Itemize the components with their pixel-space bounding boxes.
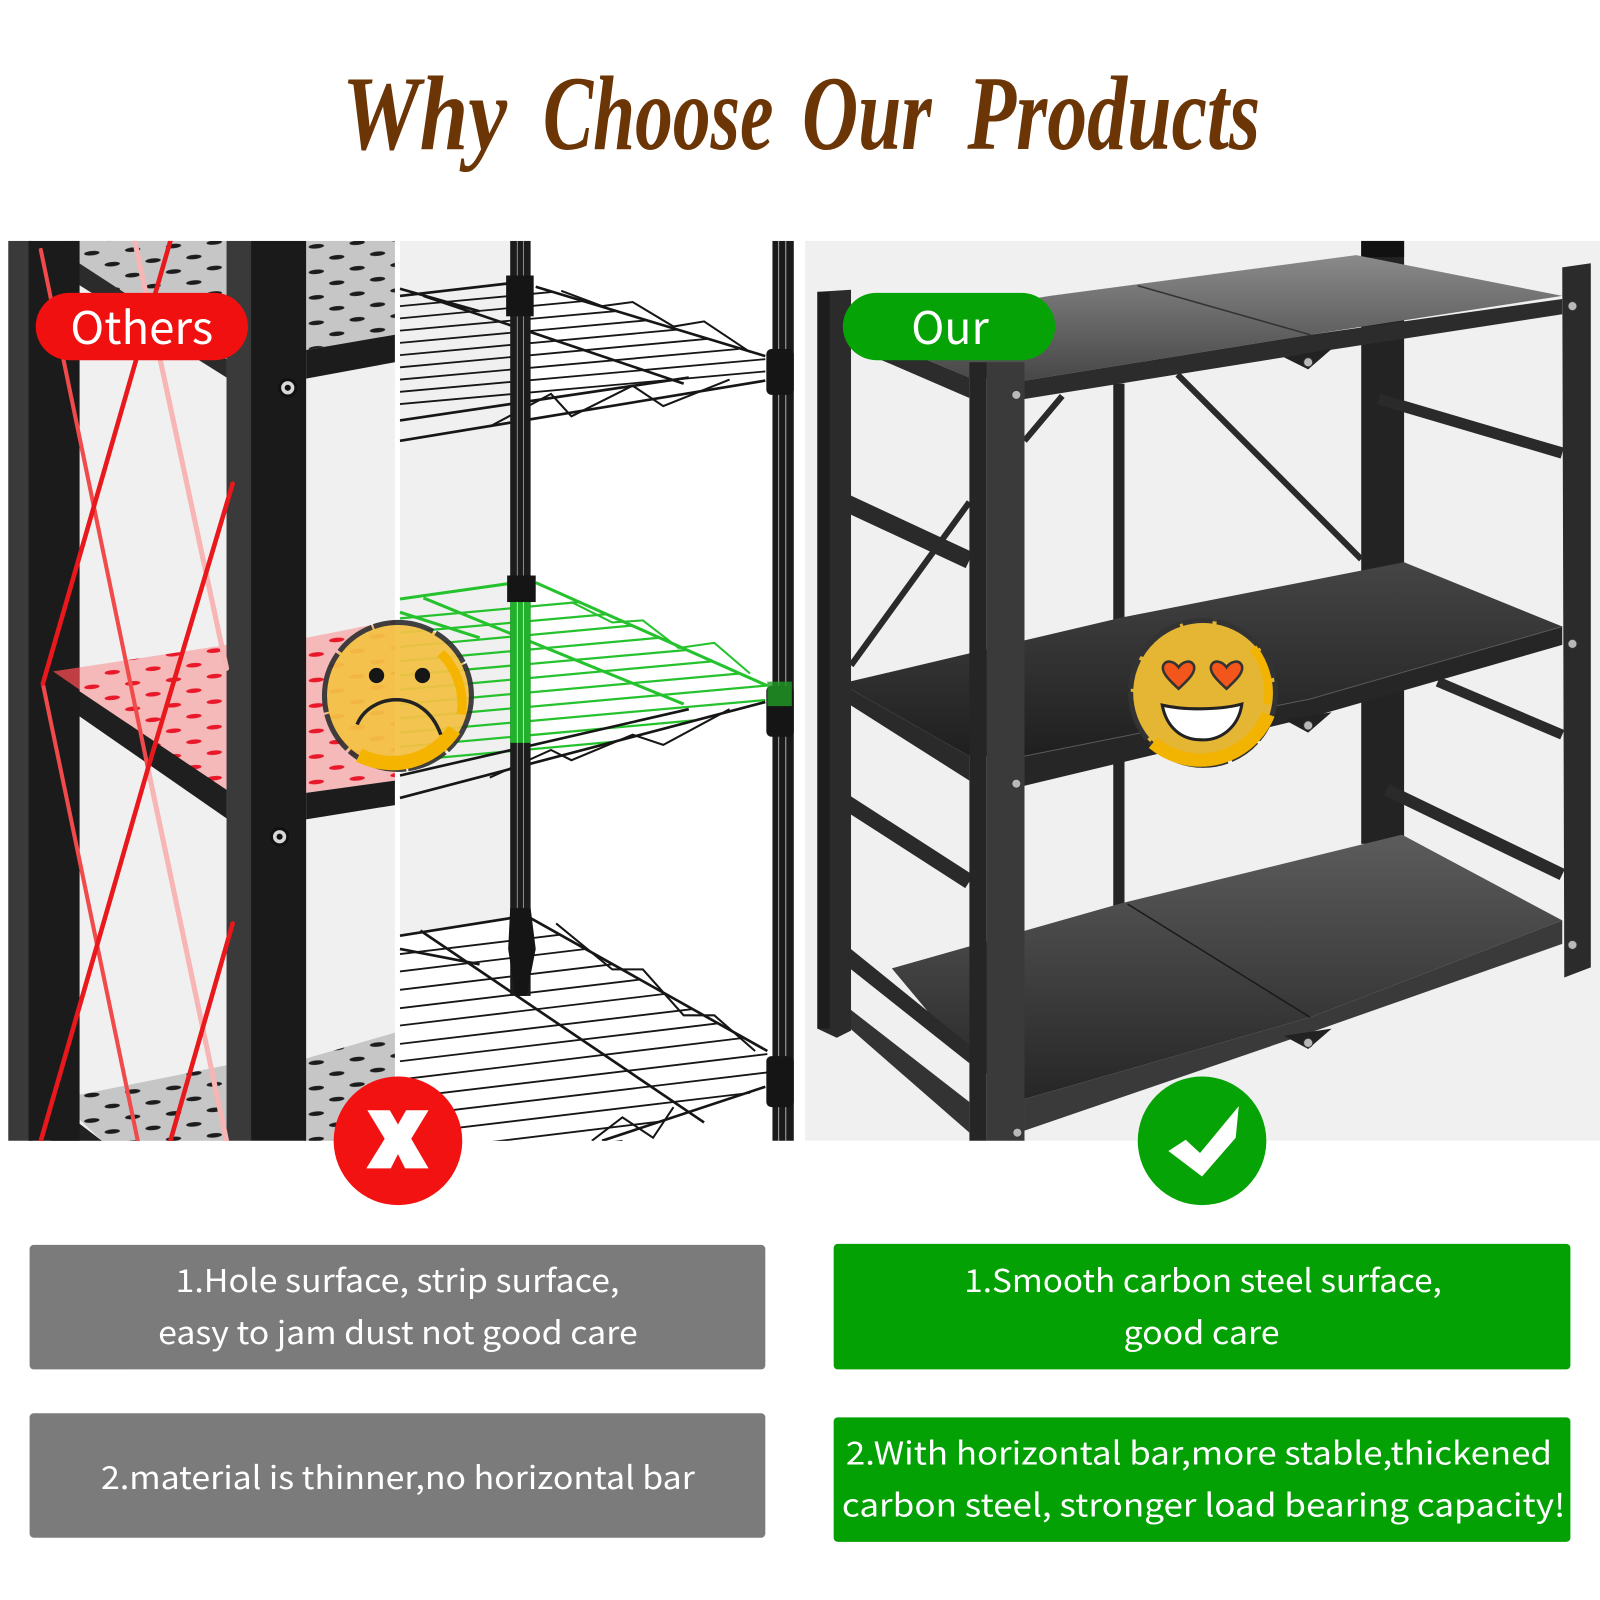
others point 1: 1.Hole surface, strip surface, (176, 1256, 619, 1302)
wire shelf middle (green) (400, 583, 767, 798)
center pole (506, 241, 536, 996)
rivets (1012, 302, 1577, 1137)
title: Why (342, 54, 508, 172)
our point 1 (834, 1244, 1570, 1369)
title: Choose (543, 54, 773, 172)
bottom shelf (841, 835, 1562, 1133)
wire shelf bottom (400, 916, 768, 1141)
our point 2 (834, 1417, 1570, 1542)
our label (843, 292, 1055, 360)
diagonals and cross bars (838, 374, 1562, 882)
our point 1: good care (1123, 1308, 1280, 1354)
icon: happy heart-eyes face (1131, 620, 1276, 765)
red x-brace lines (41, 241, 233, 1141)
our point 1: 1.Smooth carbon steel surface, (964, 1256, 1442, 1302)
title: Products (967, 54, 1260, 172)
icon: green check (1138, 1077, 1266, 1205)
others point 2 (30, 1413, 765, 1538)
panel: others product photo (8, 241, 794, 1171)
others label (36, 292, 248, 360)
rear posts (1113, 241, 1404, 911)
right pole (766, 241, 794, 1141)
others point 1: easy to jam dust not good care (158, 1308, 638, 1354)
others point 2: 2.material is thinner,no horizontal bar (101, 1453, 696, 1499)
our point 2: carbon steel, stronger load bearing capacity! (842, 1480, 1565, 1526)
icon: red cross (334, 1077, 462, 1205)
icon: sad face (324, 622, 471, 769)
our label: Our (911, 292, 989, 357)
top shelf (851, 255, 1562, 399)
others point 1 (30, 1245, 765, 1369)
perforated shelves (51, 241, 395, 1141)
panel: our product photo (805, 241, 1600, 1141)
middle shelf (841, 562, 1562, 786)
others label: Others (70, 292, 213, 357)
title (342, 54, 1260, 172)
wire shelf top (400, 283, 765, 441)
front and side posts (817, 263, 1591, 1141)
our point 2: 2.With horizontal bar,more stable,thickened (846, 1428, 1552, 1474)
title: Our (802, 54, 933, 172)
steel posts (8, 241, 306, 1141)
